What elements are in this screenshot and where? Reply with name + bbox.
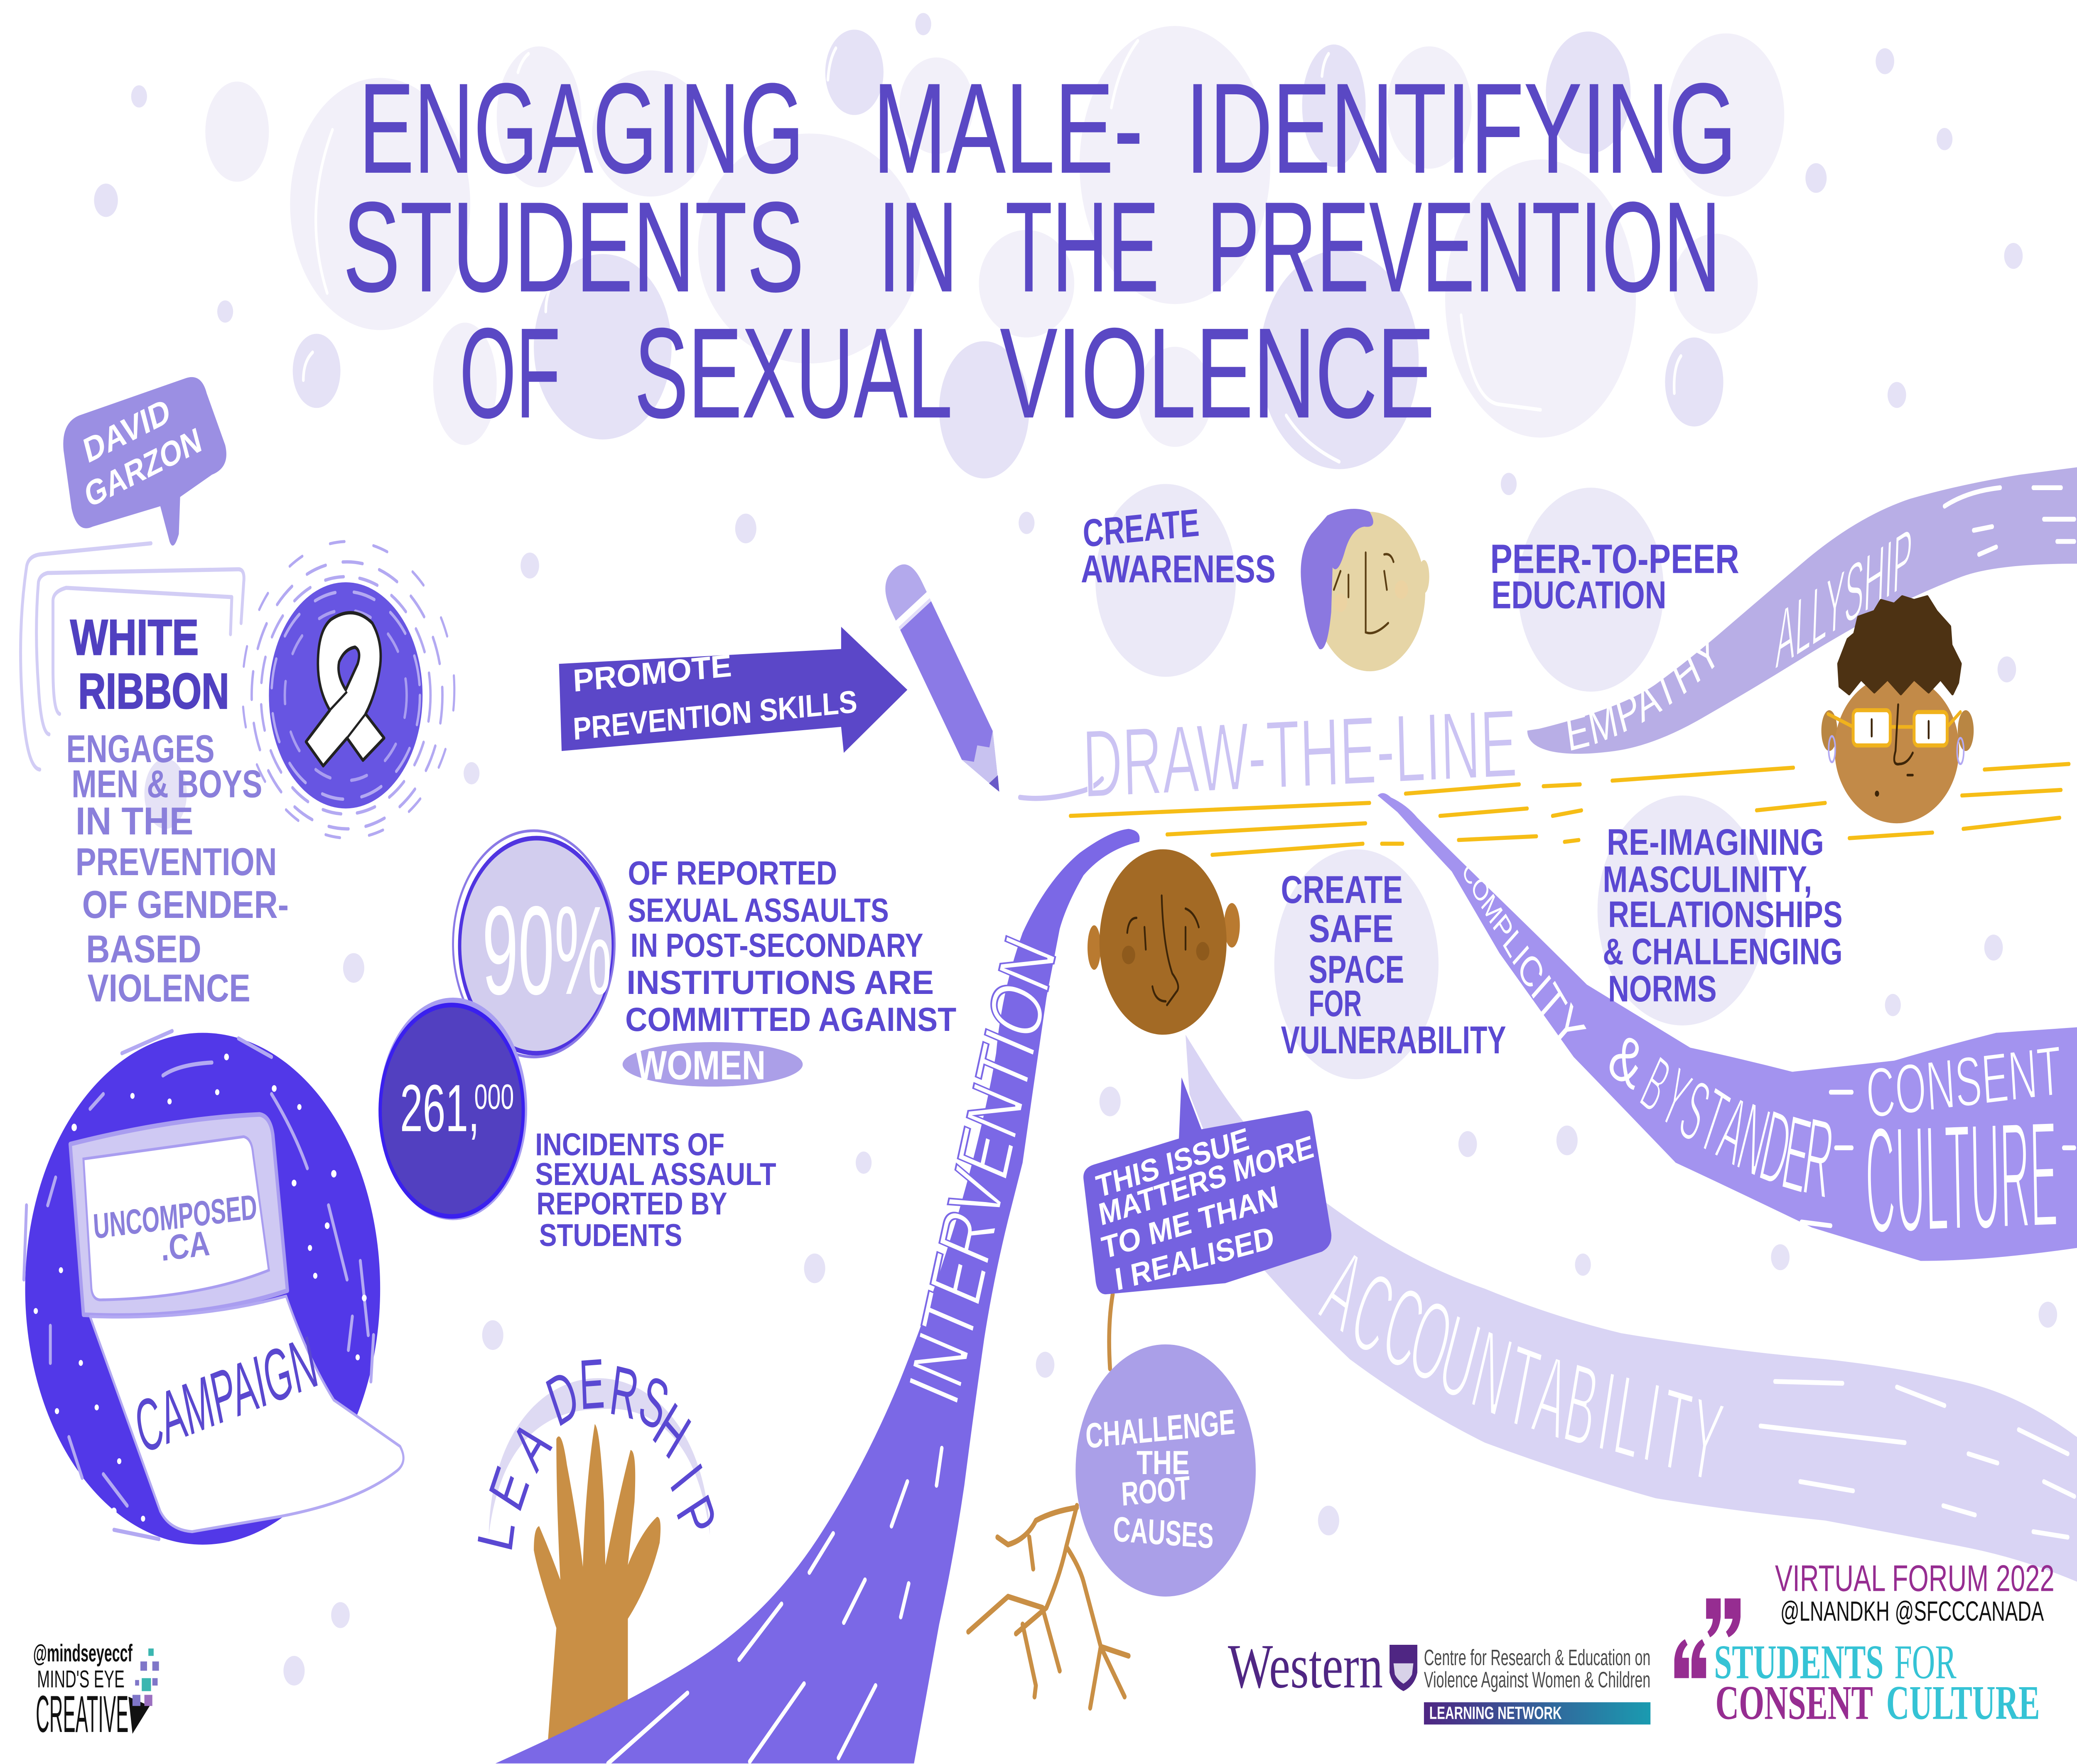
road: accountability: A	[1526, 1329, 1577, 1464]
circle: challenge the root causes	[1075, 1344, 1256, 1597]
road: accountability: L	[1607, 1351, 1651, 1484]
text: incidents of sexual assault: SEXUAL ASSAULT	[535, 1156, 776, 1192]
statistic: 261,000: 261,	[400, 1071, 479, 1146]
title: SEXUAL	[634, 302, 953, 444]
icon: raised hand	[534, 1424, 660, 1752]
text: peer-to-peer education: EDUCATION	[1492, 573, 1666, 617]
title: ENGAGING	[359, 57, 804, 200]
title: MALE-	[873, 57, 1143, 200]
logo: Mind's Eye Creative: MIND'S EYE	[37, 1666, 125, 1693]
text: re-imagining masculinity: RELATIONSHIPS	[1608, 894, 1843, 935]
logo: Western Centre for Research and Education: Violence Against Women & Children	[1424, 1667, 1650, 1692]
heading: White Ribbon: WHITE	[70, 610, 199, 665]
road: accountability: C	[1338, 1245, 1407, 1381]
circle: challenge the root causes: ROOT	[1120, 1469, 1191, 1513]
statistic: 90 percent	[453, 831, 615, 1057]
text: incidents of sexual assault: INCIDENTS OF	[535, 1126, 724, 1162]
road: empathy allyship: EMPATHY	[1563, 623, 1727, 762]
logo: Western Centre for Research and Education	[1228, 1631, 1650, 1725]
text: engages men and boys: PREVENTION	[76, 840, 277, 884]
text: re-imagining masculinity: MASCULINITY,	[1603, 859, 1812, 900]
text: engages men and boys: IN THE	[76, 800, 194, 843]
text: peer-to-peer education: PEER-TO-PEER	[1490, 537, 1739, 582]
text: of reported sexual assaults: SEXUAL ASSAULTS	[628, 891, 889, 929]
text: of reported sexual assaults: INSTITUTIONS ARE	[626, 964, 934, 1001]
label: leadership: H	[643, 1388, 701, 1473]
arrow: promote prevention skills	[559, 627, 907, 753]
highlight: women	[623, 1042, 803, 1088]
text: engages men and boys	[66, 727, 289, 1010]
text: create awareness: CREATE	[1082, 501, 1200, 556]
road: accountability: Y	[1681, 1373, 1730, 1507]
road: complicity and bystander, consent culture: E	[1775, 1092, 1817, 1217]
speech bubble: this issue matters: MATTERS MORE	[1096, 1129, 1316, 1232]
text: Virtual Forum 2022	[1775, 1558, 2055, 1627]
logo: Mind's Eye Creative	[33, 1639, 159, 1743]
text: incidents of sexual assault: REPORTED BY	[536, 1186, 727, 1221]
title: VIOLENCE	[1000, 302, 1434, 444]
panel: White Ribbon	[21, 542, 454, 1010]
road: accountability: I	[1591, 1347, 1623, 1476]
circle: challenge the root causes: CHALLENGE	[1085, 1402, 1236, 1456]
road: accountability	[1186, 1035, 2077, 1582]
highlight: women: WOMEN	[636, 1043, 766, 1088]
text: of reported sexual assaults: OF REPORTED	[628, 854, 837, 892]
text: create safe space for vulnerability: CREATE	[1281, 868, 1403, 912]
speech bubble: this issue matters	[1083, 1077, 1331, 1297]
road: complicity and bystander, consent culture: B	[1630, 1039, 1681, 1130]
statistic: 261,000	[379, 998, 527, 1220]
road: intervention: INTERVENTION	[892, 925, 1072, 1416]
title: IN	[878, 175, 957, 319]
text: of reported sexual assaults: IN POST-SECONDARY	[631, 927, 923, 964]
label: leadership: L	[467, 1514, 526, 1557]
heading: draw-the-line	[1020, 689, 1518, 818]
label: leadership: E	[478, 1456, 540, 1521]
text: create safe space for vulnerability: SPACE	[1309, 948, 1404, 991]
text: Virtual Forum 2022: VIRTUAL FORUM 2022	[1775, 1558, 2055, 1599]
statistic: 90 percent: 90%	[482, 880, 612, 1021]
character: face with curly hair and yellow glasses	[1822, 597, 1974, 823]
title: PREVENTION	[1207, 175, 1721, 319]
arrow: promote prevention skills: PREVENTION SKILLS	[572, 683, 858, 746]
text: create safe space for vulnerability: SAFE	[1309, 907, 1394, 951]
road: intervention	[496, 829, 1139, 1764]
campaign: laptop: .CA	[160, 1223, 211, 1268]
text: re-imagining masculinity: NORMS	[1608, 968, 1717, 1009]
circle: challenge the root causes: THE	[1137, 1444, 1190, 1481]
road: complicity and bystander, consent culture: R	[1797, 1094, 1840, 1223]
road: complicity and bystander, consent culture: &	[1601, 1017, 1652, 1104]
heading: White Ribbon: RIBBON	[78, 663, 229, 719]
speech bubble: this issue matters: I REALISED	[1113, 1219, 1276, 1297]
text: engages men and boys: VIOLENCE	[87, 967, 250, 1010]
text: engages men and boys: OF GENDER-	[82, 883, 289, 927]
campaign: laptop: UNCOMPOSED	[92, 1187, 258, 1246]
text: incidents of sexual assault	[535, 1126, 776, 1253]
road: complicity and bystander, consent culture: D	[1752, 1088, 1800, 1209]
arrow: promote prevention skills: PROMOTE	[572, 648, 732, 698]
text: Virtual Forum 2022: @LNANDKH @SFCCCANADA	[1780, 1596, 2044, 1627]
character: purple-haired face	[1301, 509, 1429, 671]
logo: Students for Consent Culture	[1674, 1598, 2040, 1730]
label: leadership: P	[666, 1484, 727, 1550]
road: complicity and bystander, consent culture: N	[1729, 1081, 1778, 1198]
campaign: laptop	[24, 1031, 403, 1545]
speech bubble: David Garzon: GARZON	[81, 420, 205, 515]
text: create safe space for vulnerability: FOR	[1309, 983, 1362, 1024]
campaign: laptop: CAMPAIGN	[129, 1320, 324, 1469]
logo: Students for Consent Culture: FOR	[1894, 1635, 1957, 1689]
text: create safe space for vulnerability	[1274, 849, 1506, 1079]
text: of reported sexual assaults: COMMITTED AGAINST	[625, 1001, 956, 1038]
label: leadership: A	[502, 1406, 561, 1484]
leadership: arc and raised hand	[467, 1344, 727, 1752]
text: create safe space for vulnerability: VULNERABILITY	[1281, 1018, 1506, 1062]
text: re-imagining masculinity	[1598, 795, 1843, 1026]
character: bald brown face	[1088, 849, 1240, 1035]
logo: Students for Consent Culture: CONSENT	[1715, 1676, 1873, 1730]
circle: challenge the root causes: CAUSES	[1112, 1509, 1214, 1556]
logo: Mind's Eye Creative: @mindseyeccf	[33, 1639, 133, 1667]
road: accountability: N	[1462, 1305, 1522, 1441]
text: re-imagining masculinity: RE-IMAGINING	[1607, 822, 1824, 863]
speech bubble: David Garzon	[63, 377, 226, 546]
road: complicity and bystander, consent culture: S	[1669, 1060, 1721, 1161]
yellow draw-the-line strokes	[1070, 764, 2069, 855]
logo: Mind's Eye Creative: CREATIVE	[36, 1685, 128, 1743]
heading: draw-the-line: DRAW-THE-LINE	[1081, 689, 1518, 818]
road: complicity and bystander, consent culture: T	[1689, 1069, 1738, 1174]
logo: Western Centre for Research and Education: LEARNING NETWORK	[1429, 1703, 1562, 1723]
road: accountability: B	[1557, 1338, 1606, 1472]
road: complicity and bystander, consent culture	[1377, 793, 2077, 1266]
speech bubble: this issue matters: THIS ISSUE	[1093, 1121, 1252, 1205]
road: complicity and bystander, consent culture: COMPLICITY	[1458, 856, 1593, 1062]
logo: Western Centre for Research and Education: Centre for Research & Education on	[1424, 1645, 1650, 1670]
text: re-imagining masculinity: & CHALLENGING	[1603, 931, 1843, 972]
label: leadership: D	[539, 1354, 587, 1442]
speech bubble: David Garzon: DAVID	[80, 390, 174, 471]
logo: Students for Consent Culture: CULTURE	[1886, 1676, 2040, 1730]
logo: Students for Consent Culture: STUDENTS	[1714, 1635, 1883, 1689]
text: create awareness	[1081, 484, 1276, 677]
road: accountability: T	[1498, 1321, 1548, 1455]
road: empathy allyship	[1527, 467, 2077, 762]
icon: white ribbon	[243, 542, 454, 838]
road: accountability: I	[1636, 1358, 1667, 1487]
text: incidents of sexual assault: STUDENTS	[539, 1217, 682, 1253]
frame lines	[21, 543, 244, 770]
road: complicity and bystander, consent culture: Y	[1650, 1050, 1701, 1146]
heading: White Ribbon	[70, 610, 229, 719]
label: leadership: R	[606, 1350, 643, 1435]
label: leadership: I	[660, 1452, 714, 1504]
text: engages men and boys: MEN & BOYS	[71, 763, 262, 806]
label: leadership	[467, 1344, 727, 1557]
title: OF	[460, 302, 560, 444]
icon: pencil	[878, 555, 1015, 806]
road: accountability: C	[1371, 1259, 1436, 1396]
label: leadership: S	[632, 1360, 676, 1446]
road: empathy allyship: ALLYSHIP	[1774, 509, 1914, 687]
text: engages men and boys: ENGAGES	[66, 727, 215, 771]
roots and stem	[968, 1294, 1129, 1708]
speech bubble: this issue matters: TO ME THAN	[1099, 1179, 1281, 1266]
road: complicity and bystander, consent culture: A	[1709, 1075, 1758, 1186]
road: accountability: O	[1397, 1272, 1464, 1410]
statistic: 261,000: 000	[474, 1077, 514, 1116]
road: accountability: U	[1429, 1289, 1490, 1425]
road: accountability: A	[1309, 1223, 1378, 1357]
text: of reported sexual assaults	[625, 854, 956, 1038]
text: create awareness: AWARENESS	[1081, 547, 1276, 591]
title: STUDENTS	[343, 175, 804, 319]
title: THE	[1005, 175, 1159, 319]
label: leadership: E	[578, 1344, 606, 1424]
text: peer-to-peer education	[1490, 488, 1739, 692]
title	[343, 57, 1736, 444]
text: engages men and boys: BASED	[86, 927, 201, 971]
logo: Western Centre for Research and Education: Western	[1228, 1631, 1383, 1701]
title: IDENTIFYING	[1186, 57, 1736, 200]
road: accountability: T	[1652, 1364, 1698, 1497]
